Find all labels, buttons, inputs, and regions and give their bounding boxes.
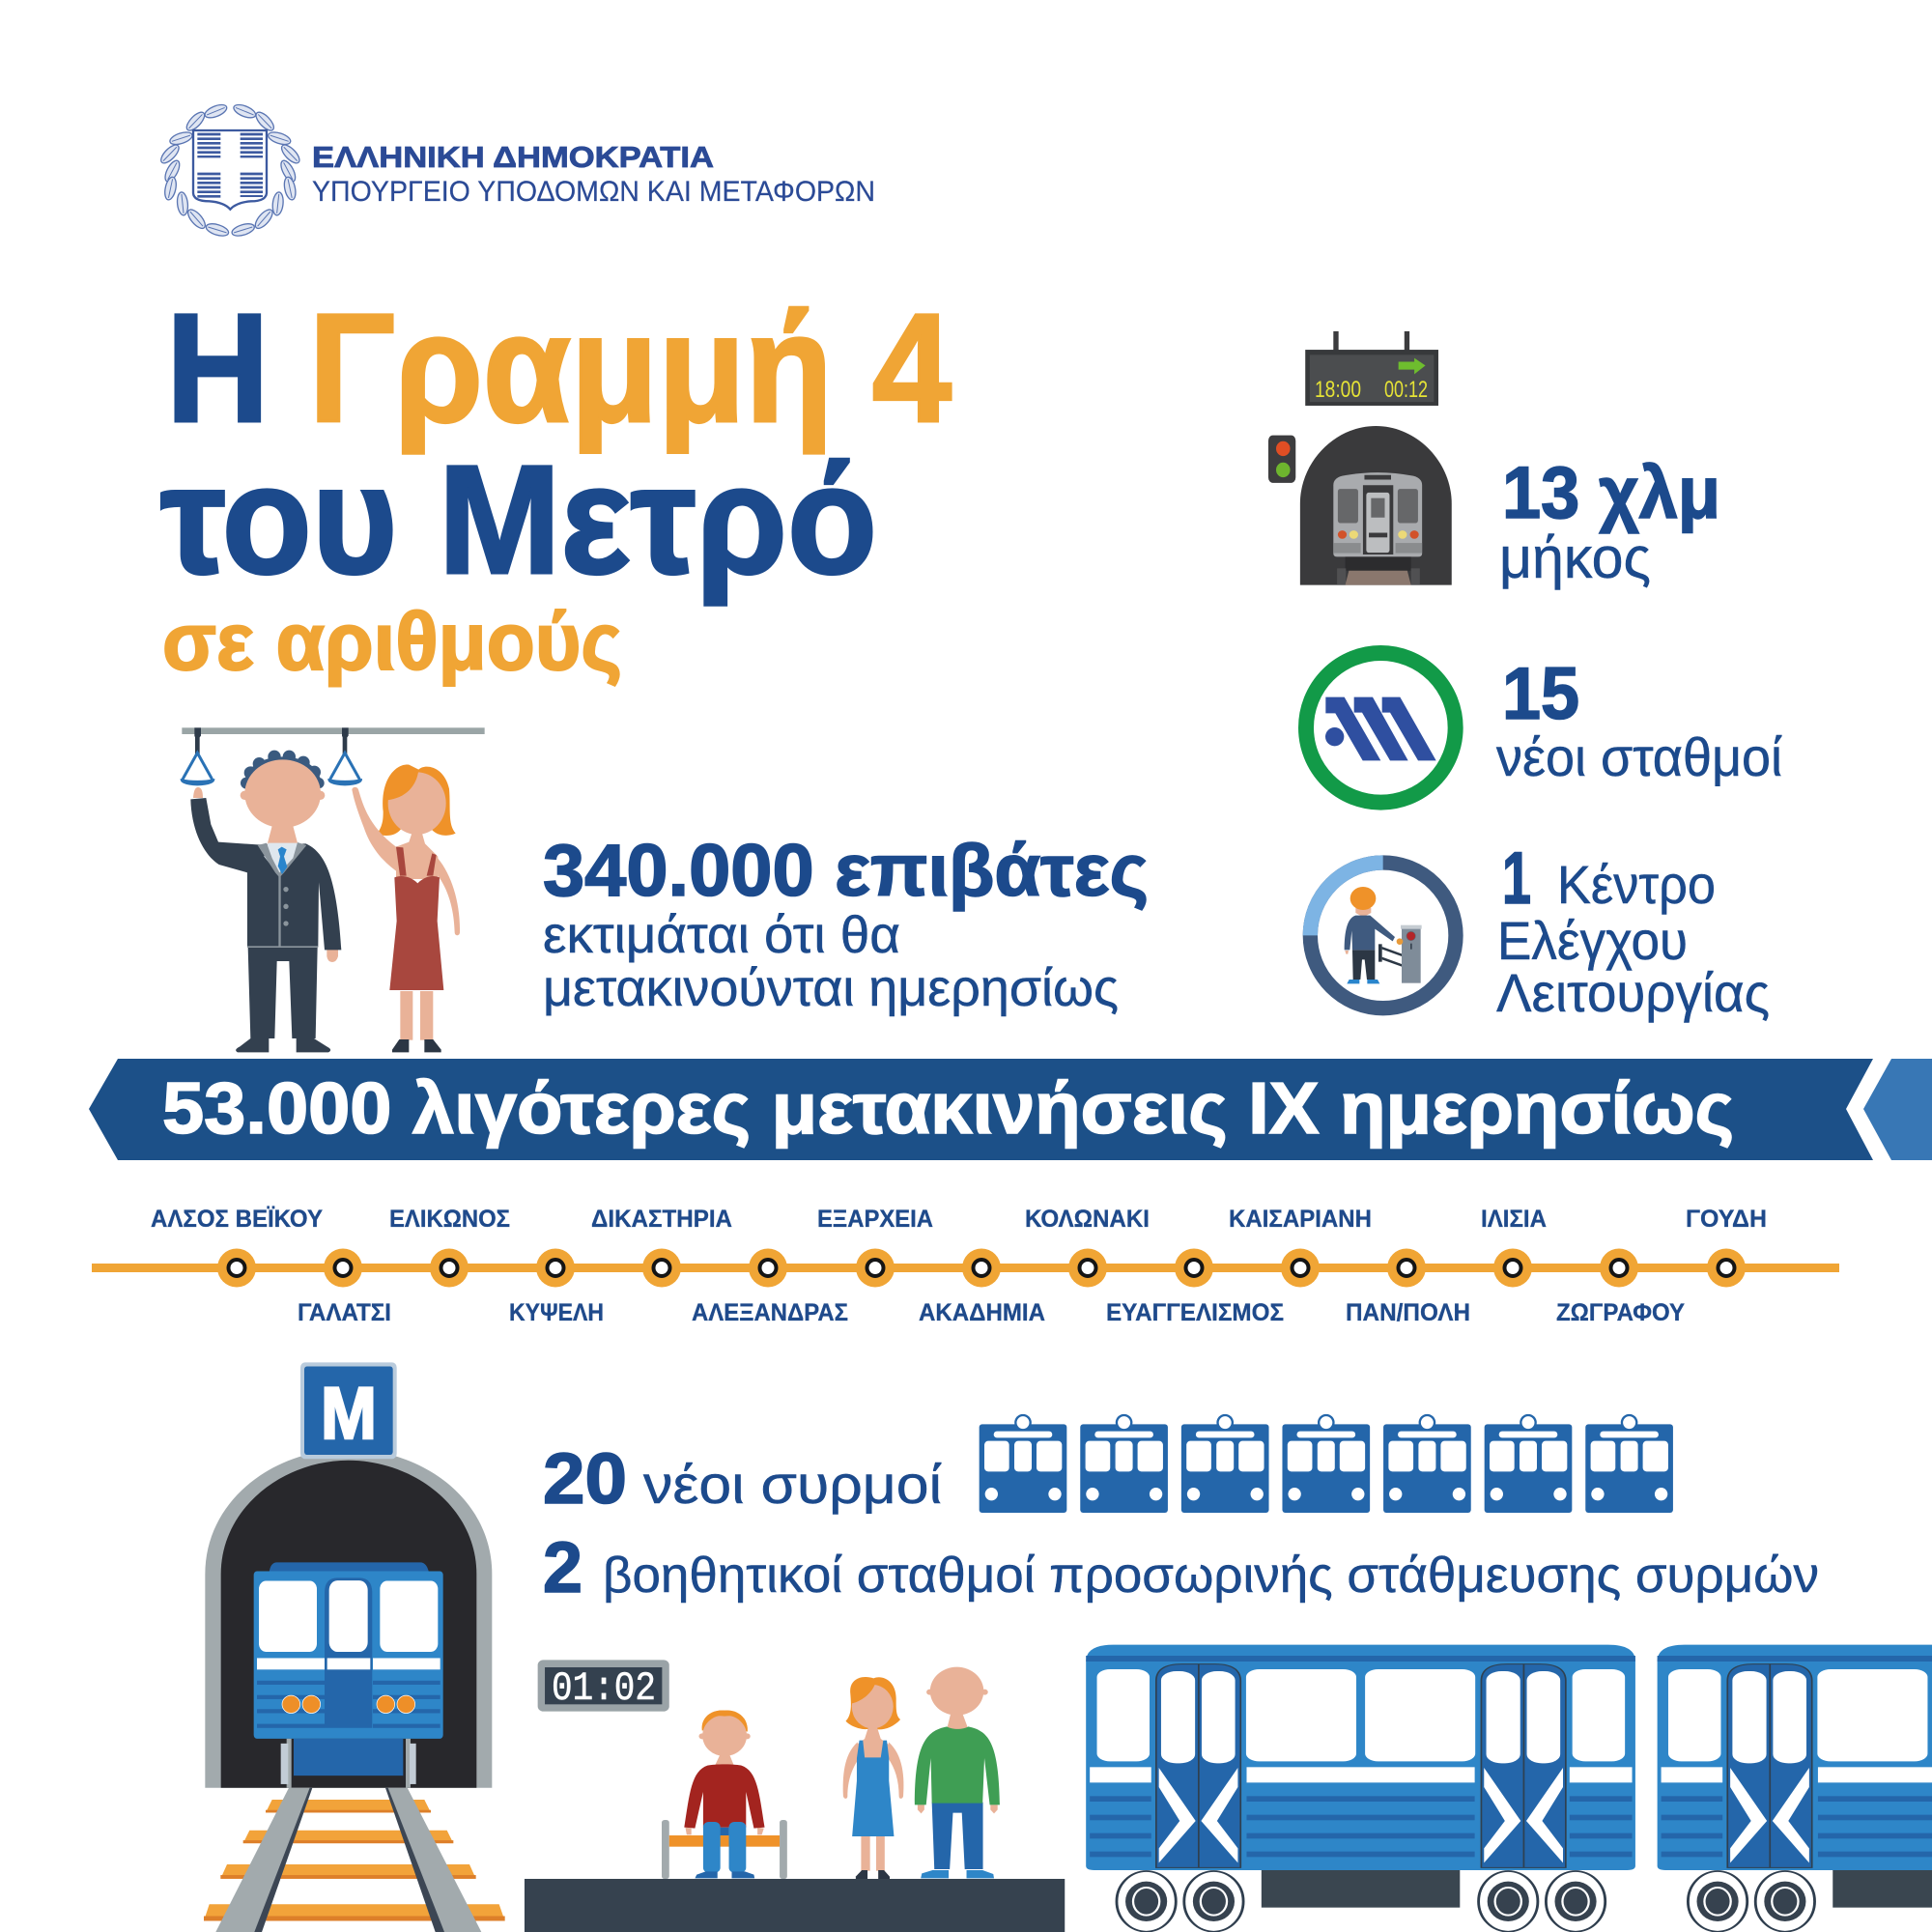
subtitle: σε αριθμούς bbox=[162, 596, 622, 687]
grab rail bbox=[182, 727, 485, 734]
line bbox=[92, 1264, 1839, 1272]
station names: ΚΟΛΩΝΑΚΙ bbox=[1025, 1206, 1150, 1233]
title bbox=[160, 281, 952, 687]
clock frame bbox=[538, 1660, 669, 1712]
station names: ΖΩΓΡΑΦΟΥ bbox=[1556, 1299, 1685, 1326]
wreath bbox=[158, 102, 302, 239]
green ring bbox=[1306, 653, 1456, 803]
tunnel arch bbox=[205, 1449, 492, 1788]
station markers bbox=[217, 1248, 1746, 1287]
train front bbox=[254, 1562, 443, 1788]
stat: auxiliary stations bbox=[543, 1527, 1819, 1607]
shield bbox=[193, 130, 267, 210]
stat: control centre bbox=[1496, 838, 1770, 1023]
station names: ΠΑΝ/ΠΟΛΗ bbox=[1346, 1299, 1470, 1326]
station names: ΕΞΑΡΧΕΙΑ bbox=[817, 1206, 933, 1233]
rails bbox=[215, 1788, 481, 1932]
station names: ΓΟΥΔΗ bbox=[1686, 1206, 1767, 1233]
remaining time: 00:12 bbox=[1384, 377, 1428, 403]
station names: ΓΑΛΑΤΣΙ bbox=[298, 1299, 391, 1326]
icon: athens metro logo in green ring bbox=[1306, 653, 1456, 803]
icons: row of seven trains bbox=[980, 1415, 1673, 1513]
banner tail bbox=[1863, 1059, 1932, 1160]
seated boy bbox=[684, 1711, 765, 1878]
title line 1: Η Γραμμή 4 bbox=[166, 281, 952, 454]
title line 2: του Μετρό bbox=[160, 433, 877, 606]
stations label: νέοι σταθμοί bbox=[1496, 726, 1782, 787]
station names: ΑΛΕΞΑΝΔΡΑΣ bbox=[692, 1299, 848, 1326]
icon: tunnel with departure board and signal bbox=[1268, 331, 1452, 585]
woman in red dress bbox=[352, 765, 460, 1052]
passengers description line 1: εκτιμάται ότι θα bbox=[543, 906, 900, 964]
length number: 13 χλμ bbox=[1502, 452, 1720, 534]
operator figure bbox=[1345, 887, 1422, 983]
bench bbox=[662, 1820, 787, 1879]
first carriage bbox=[1086, 1645, 1635, 1932]
header: ministry logo and name bbox=[158, 102, 875, 239]
departure board bbox=[1305, 331, 1438, 406]
second carriage bbox=[1658, 1645, 1932, 1932]
length label: μήκος bbox=[1499, 526, 1651, 590]
tunnel arch bbox=[1300, 426, 1452, 585]
trains label: νέοι συρμοί bbox=[643, 1454, 942, 1515]
auxiliary number: 2 bbox=[543, 1527, 582, 1607]
ministry name line 1: ΕΛΛΗΝΙΚΗ ΔΗΜΟΚΡΑΤΙΑ bbox=[312, 140, 714, 174]
departure board times bbox=[1315, 377, 1428, 403]
metro mark bbox=[1325, 697, 1436, 760]
station names: ΕΥΑΓΓΕΛΙΣΜΟΣ bbox=[1106, 1299, 1284, 1326]
banner text: 53.000 λιγότερες μετακινήσεις ΙΧ ημερησίως bbox=[162, 1067, 1734, 1149]
passengers description line 2: μετακινούνται ημερησίως bbox=[543, 959, 1119, 1017]
stations number: 15 bbox=[1502, 653, 1579, 735]
waiting man bbox=[915, 1667, 1000, 1878]
station names: ΑΛΣΟΣ ΒΕΪΚΟΥ bbox=[151, 1206, 323, 1233]
illustration: standing passengers holding straps bbox=[181, 727, 485, 1052]
control label line 1: Κέντρο bbox=[1557, 854, 1716, 915]
icon: greek coat of arms emblem bbox=[158, 102, 302, 239]
station names: ΕΛΙΚΩΝΟΣ bbox=[389, 1206, 510, 1233]
stat: stations bbox=[1496, 653, 1782, 787]
metro sign letter: Μ bbox=[321, 1373, 377, 1455]
banner arrow bbox=[89, 1059, 1873, 1160]
banner: fewer car trips bbox=[89, 1059, 1932, 1160]
traffic signal bbox=[1268, 436, 1295, 483]
line 4 station diagram bbox=[92, 1206, 1839, 1326]
platform slab bbox=[525, 1879, 1065, 1932]
illustration: platform with waiting passengers bbox=[525, 1660, 1065, 1932]
track sleepers bbox=[204, 1800, 505, 1921]
ministry name line 2: ΥΠΟΥΡΓΕΙΟ ΥΠΟΔΟΜΩΝ ΚΑΙ ΜΕΤΑΦΟΡΩΝ bbox=[312, 176, 875, 208]
control number: 1 bbox=[1502, 838, 1531, 920]
stat: length bbox=[1499, 452, 1720, 590]
station names: ΚΥΨΕΛΗ bbox=[509, 1299, 604, 1326]
passengers number: 340.000 επιβάτες bbox=[543, 830, 1149, 912]
departure time: 18:00 bbox=[1315, 377, 1361, 403]
control label line 3: Λειτουργίας bbox=[1496, 962, 1770, 1023]
strap handles bbox=[181, 727, 362, 785]
man in suit bbox=[190, 751, 341, 1052]
station names: ΚΑΙΣΑΡΙΑΝΗ bbox=[1229, 1206, 1372, 1233]
icon: control centre operator in ring bbox=[1310, 863, 1456, 1009]
trains number: 20 bbox=[543, 1438, 627, 1519]
station names: ΑΚΑΔΗΜΙΑ bbox=[919, 1299, 1045, 1326]
station names bbox=[151, 1206, 1767, 1326]
waiting woman bbox=[843, 1677, 904, 1879]
ring bbox=[1310, 863, 1456, 1009]
metro sign bbox=[300, 1362, 397, 1459]
stat: new trains bbox=[543, 1438, 942, 1519]
clock time: 01:02 bbox=[552, 1665, 656, 1712]
station names: ΙΛΙΣΙΑ bbox=[1481, 1206, 1547, 1233]
illustration: blue metro carriages bbox=[1086, 1645, 1932, 1932]
train front view bbox=[1333, 472, 1422, 585]
control label line 2: Ελέγχου bbox=[1497, 910, 1688, 971]
illustration: tunnel with train and tracks bbox=[204, 1362, 505, 1932]
stat: daily passengers bbox=[543, 830, 1149, 1017]
station names: ΔΙΚΑΣΤΗΡΙΑ bbox=[591, 1206, 732, 1233]
auxiliary label: βοηθητικοί σταθμοί προσωρινής στάθμευσης συρμών bbox=[603, 1548, 1819, 1604]
